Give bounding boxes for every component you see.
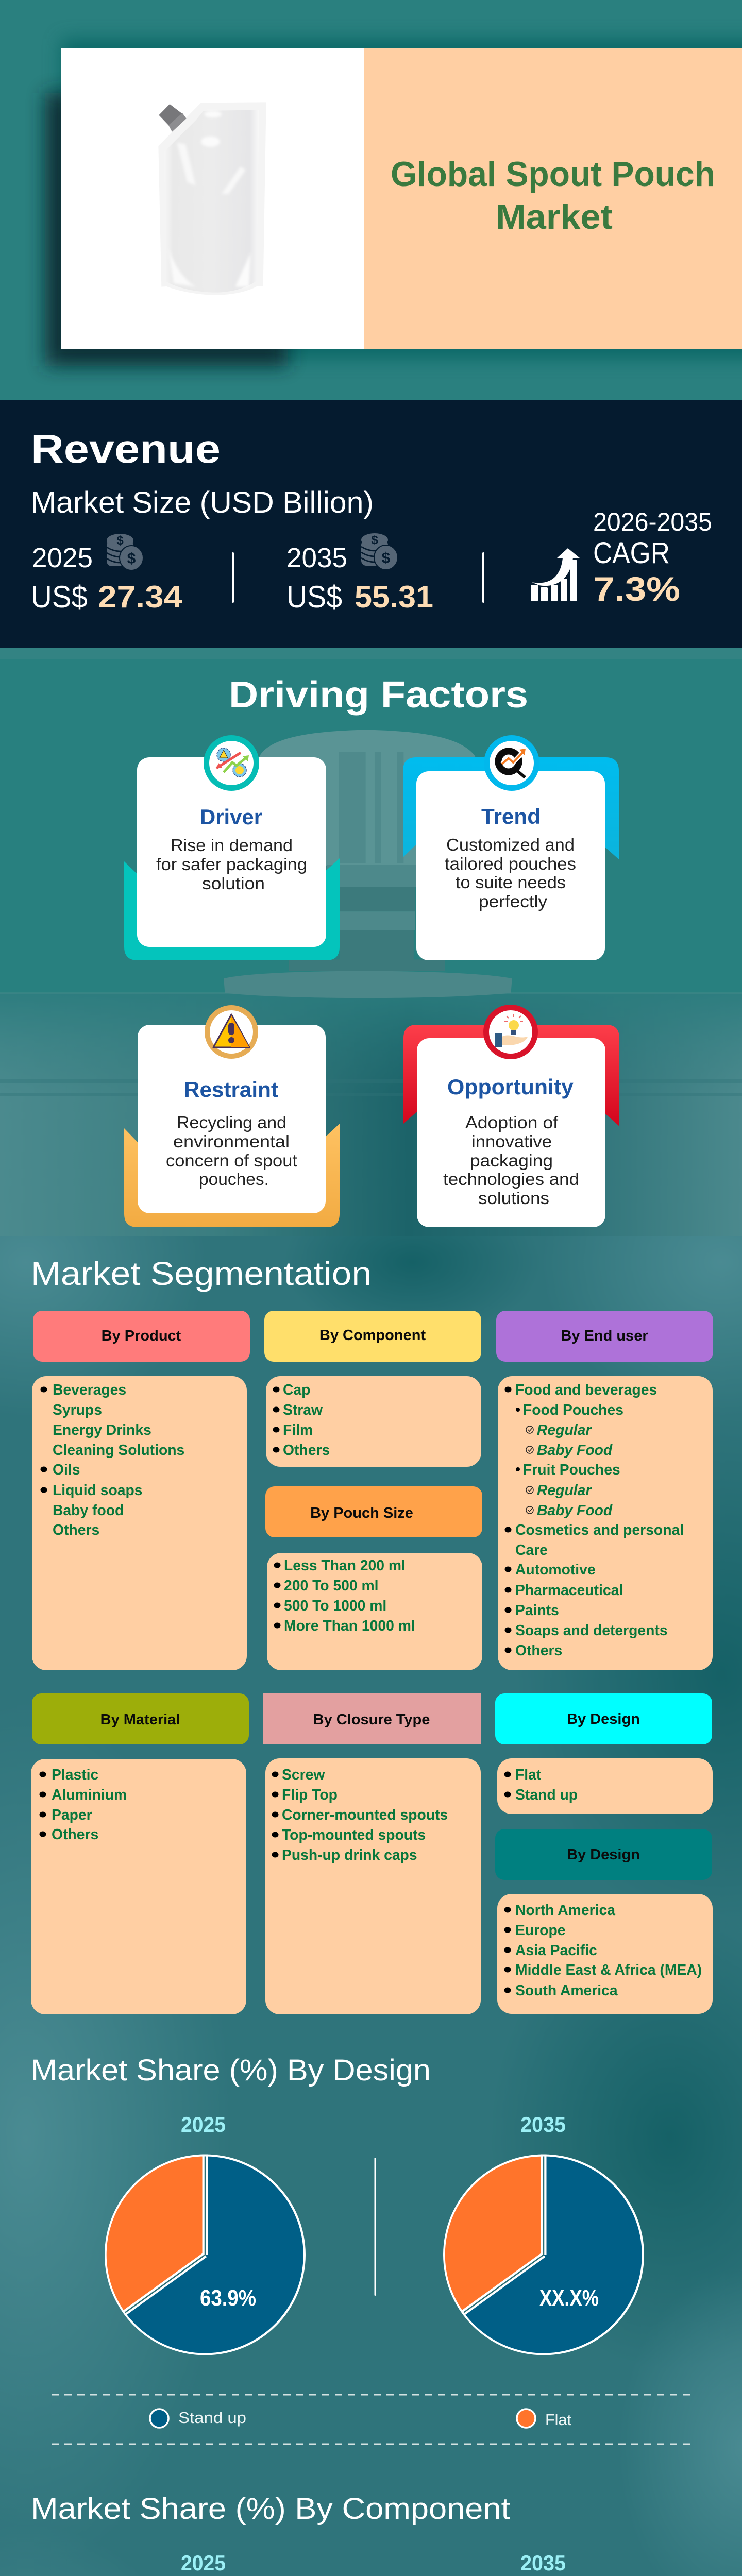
trend text: Customized and — [446, 835, 575, 854]
icon: coins 2025 — [107, 534, 143, 570]
revenue 2035 — [286, 533, 433, 614]
revenue heading: Revenue — [31, 426, 221, 471]
icon: growth chart arrow — [531, 548, 580, 601]
panel: by design regions: Middle East & Africa (MEA) — [515, 1961, 702, 1978]
panel: by component: By Component — [319, 1327, 426, 1344]
panel: by end user: Automotive — [515, 1561, 596, 1578]
panel: by end user: Care — [515, 1541, 548, 1558]
panel: by pouch size: 200 To 500 ml — [284, 1577, 379, 1594]
faint cap image — [224, 730, 512, 998]
heading: market share by component: Market Share (%) By Component — [31, 2492, 510, 2526]
panel: by design: Stand up — [515, 1786, 578, 1803]
panel: by material: Plastic — [52, 1766, 98, 1783]
year label 2025: 2025 — [181, 2551, 226, 2575]
panel: by pouch size — [265, 1486, 482, 1670]
panel: by end user — [496, 1311, 713, 1670]
trend text: to suite needs — [456, 873, 566, 892]
opportunity text: innovative — [471, 1132, 552, 1151]
driver text: Rise in demand — [171, 836, 293, 855]
panel: by product: Beverages — [53, 1381, 126, 1398]
icon: driver — [204, 735, 259, 791]
opportunity text: Adoption of — [465, 1113, 559, 1132]
panel: by component: Cap — [283, 1381, 310, 1398]
panel: by end user: Pharmaceutical — [515, 1582, 623, 1598]
panel: by product: Energy Drinks — [53, 1421, 151, 1438]
opportunity text: solutions — [478, 1189, 549, 1208]
title — [391, 155, 715, 236]
panel: by product: By Product — [102, 1328, 181, 1344]
panel: by material: Others — [52, 1826, 98, 1842]
icon: coins 2035 — [361, 533, 398, 570]
panel: by end user: Fruit Pouches — [523, 1461, 620, 1478]
panel: by component: Others — [283, 1442, 330, 1458]
panel: by pouch size: More Than 1000 ml — [284, 1617, 415, 1634]
divider — [482, 552, 484, 603]
icon: coins 2025: $ — [116, 534, 124, 548]
title: Global Spout Pouch — [391, 155, 715, 194]
panel: by closure type: Top-mounted spouts — [282, 1826, 426, 1843]
panel: by product: Liquid soaps — [53, 1482, 143, 1498]
panel: by component — [264, 1311, 481, 1467]
revenue 2025: 27.34 — [98, 580, 183, 614]
heading: market segmentation: Market Segmentation — [31, 1255, 372, 1292]
panel: by product: Syrups — [53, 1401, 102, 1418]
panel: by end user: Others — [515, 1642, 562, 1658]
panel: by design: By Design — [567, 1711, 640, 1727]
restraint text — [166, 1113, 297, 1189]
pie chart: design 2035 — [443, 2155, 644, 2355]
CAGR block: 7.3% — [593, 570, 680, 608]
panel: by end user: Paints — [515, 1602, 559, 1618]
panel: by design regions: South America — [515, 1982, 618, 1998]
year label 2035: 2035 — [520, 2551, 566, 2575]
panel: by closure type: Screw — [282, 1766, 325, 1783]
driver text: solution — [202, 874, 265, 893]
trend text: perfectly — [479, 892, 548, 911]
panel: by pouch size: By Pouch Size — [310, 1505, 413, 1521]
panel: driver — [124, 735, 340, 960]
panel: by material: Aluminium — [52, 1786, 127, 1803]
panel: by end user: Regular — [537, 1421, 592, 1438]
panel: by end user: Food Pouches — [523, 1401, 623, 1418]
restraint text: Recycling and — [177, 1113, 286, 1132]
panel: by end user: By End user — [561, 1328, 648, 1344]
legend: design: Stand up — [178, 2409, 246, 2427]
icon: coins 2025: $ — [127, 550, 136, 567]
restraint text: concern of spout — [166, 1151, 297, 1170]
panel: by end user: Soaps and detergents — [515, 1622, 668, 1638]
trend text — [445, 835, 576, 911]
panel: by component: Straw — [283, 1401, 323, 1418]
panel: trend — [403, 735, 619, 960]
revenue 2035: 2035 — [286, 543, 347, 573]
panel: by component: Film — [283, 1421, 313, 1438]
panel: by closure type — [263, 1693, 481, 2014]
panel: by pouch size: 500 To 1000 ml — [284, 1597, 386, 1614]
driver text: for safer packaging — [156, 855, 307, 874]
CAGR block: 2026-2035 — [593, 507, 712, 536]
panel: restraint — [124, 1005, 340, 1227]
pie chart: design 2025: 63.9% — [200, 2285, 256, 2311]
panel: by product: Baby food — [53, 1502, 124, 1518]
panel: by end user: Baby Food — [537, 1442, 613, 1458]
icon: coins 2035: $ — [371, 533, 378, 547]
panel: by design regions — [495, 1829, 713, 2014]
icon: opportunity — [483, 1005, 538, 1059]
panel: by material — [31, 1693, 249, 2014]
panel: by closure type: Push-up drink caps — [282, 1846, 417, 1863]
revenue 2025: US$ — [31, 580, 88, 614]
panel: by design — [495, 1693, 713, 1814]
opportunity heading: Opportunity — [447, 1075, 574, 1099]
pie chart: design 2025 — [105, 2155, 306, 2355]
panel: by product: Cleaning Solutions — [53, 1442, 184, 1458]
market size label: Market Size (USD Billion) — [31, 486, 374, 519]
legend: design — [52, 2395, 695, 2444]
panel: by material: Paper — [52, 1806, 92, 1823]
icon: restraint — [205, 1005, 258, 1059]
driver heading: Driver — [200, 805, 262, 829]
year label 2035: 2035 — [520, 2112, 566, 2137]
panel: by pouch size: Less Than 200 ml — [284, 1557, 406, 1573]
panel: by end user: Food and beverages — [515, 1381, 657, 1398]
panel: by closure type: By Closure Type — [313, 1711, 430, 1728]
panel: opportunity — [403, 1005, 619, 1227]
year label 2025: 2025 — [181, 2112, 226, 2137]
panel: by design regions: By Design — [567, 1846, 640, 1863]
hero image box with pouch — [61, 48, 742, 349]
hero panel — [0, 0, 742, 400]
revenue band — [0, 400, 742, 648]
panel: by end user: Regular — [537, 1482, 592, 1498]
icon: trend — [484, 735, 539, 791]
panel: by product — [32, 1311, 250, 1670]
restraint text: environmental — [173, 1132, 290, 1151]
panel: by closure type: Flip Top — [282, 1786, 338, 1803]
revenue 2035: US$ — [286, 580, 342, 614]
restraint heading: Restraint — [184, 1077, 278, 1101]
panel: by end user: Cosmetics and personal — [515, 1521, 684, 1538]
trend text: tailored pouches — [445, 854, 576, 873]
panel: by design regions: Europe — [515, 1922, 565, 1938]
CAGR block — [593, 507, 712, 608]
panel: by product: Others — [53, 1521, 99, 1538]
trend heading: Trend — [481, 804, 541, 828]
panel: by design: Flat — [515, 1766, 542, 1783]
revenue 2035: 55.31 — [355, 580, 433, 614]
icon: spout pouch — [158, 102, 266, 295]
opportunity text — [443, 1113, 579, 1208]
panel: by end user: Baby Food — [537, 1502, 613, 1518]
textured background for segmentation and charts — [0, 1108, 742, 2576]
CAGR block: CAGR — [593, 536, 670, 570]
opportunity text: packaging — [470, 1151, 553, 1170]
driving factors panel background — [0, 648, 742, 1236]
opportunity text: technologies and — [443, 1170, 579, 1189]
divider — [232, 552, 234, 603]
driver text — [156, 836, 307, 893]
pie chart: design 2035: XX.X% — [539, 2285, 599, 2311]
panel: by design regions: North America — [515, 1902, 615, 1918]
panel: by closure type: Corner-mounted spouts — [282, 1806, 448, 1823]
heading: driving factors: Driving Factors — [229, 674, 528, 716]
restraint text: pouches. — [199, 1170, 269, 1189]
icon: coins 2035: $ — [382, 550, 391, 567]
title: Market — [496, 197, 613, 236]
panel: by material: By Material — [100, 1711, 180, 1728]
panel: by product: Oils — [53, 1461, 80, 1478]
panel: by design regions: Asia Pacific — [515, 1942, 597, 1958]
divider — [374, 2158, 376, 2296]
legend: design: Flat — [545, 2411, 571, 2429]
revenue 2025 — [31, 534, 183, 614]
heading: market share by design: Market Share (%) By Design — [31, 2054, 431, 2087]
revenue 2025: 2025 — [32, 543, 93, 573]
